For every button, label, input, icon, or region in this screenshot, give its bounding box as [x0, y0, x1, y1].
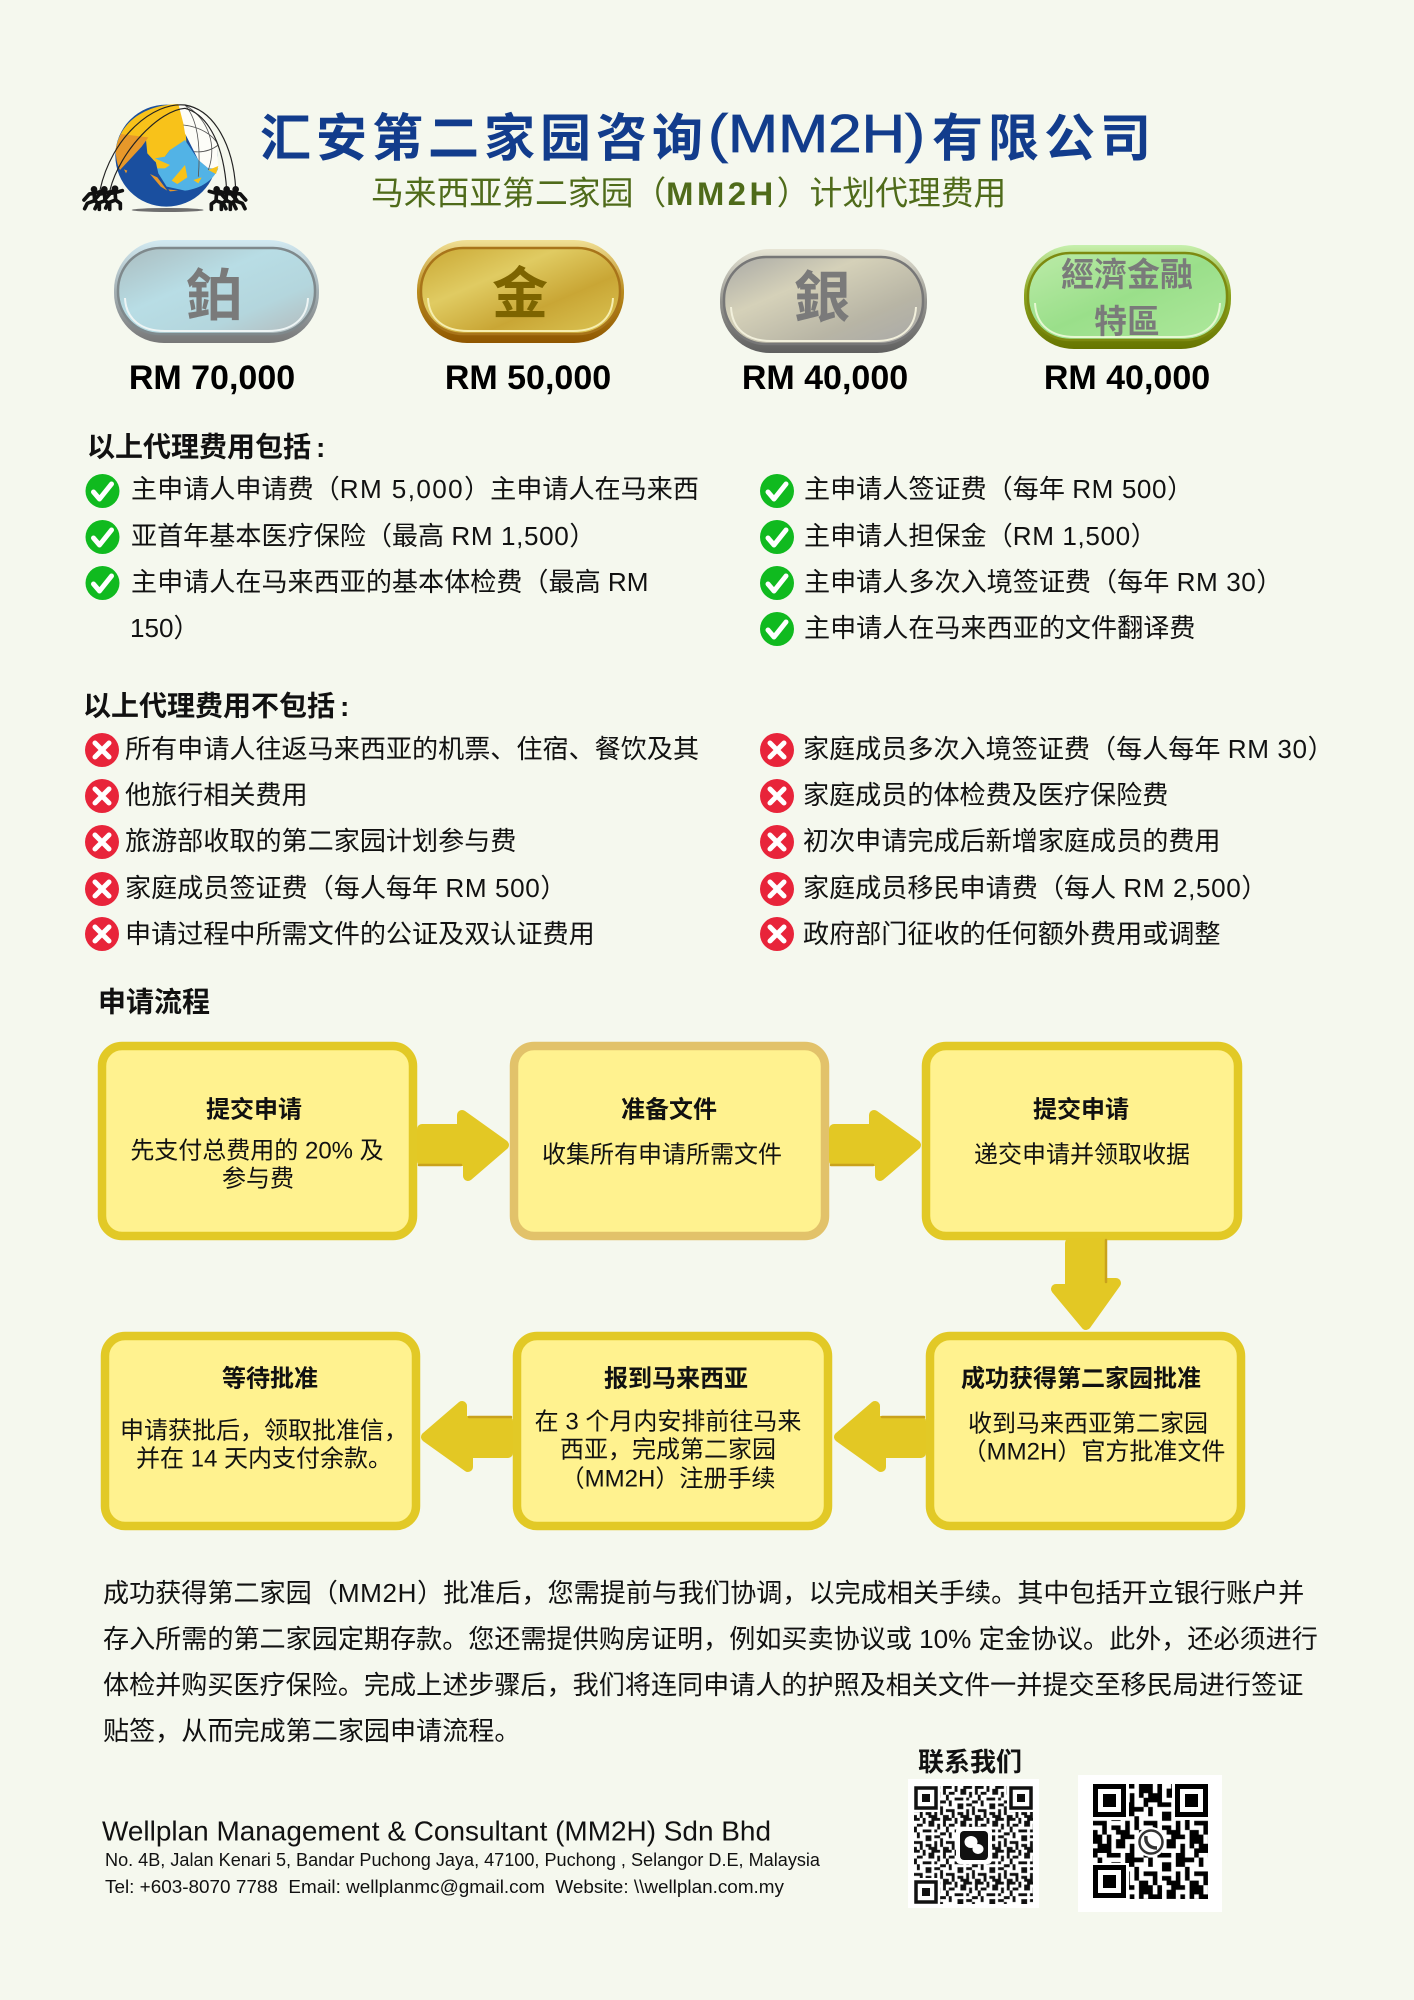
arrow: step 5 to 6 — [426, 1406, 511, 1467]
QR code: WeChat — [908, 1779, 1039, 1908]
panel: economic zone plan: 特區 — [1094, 295, 1160, 343]
step 6: 并在 14 天内支付余款。 — [136, 1446, 392, 1473]
step 5 — [517, 1336, 828, 1526]
item: 家庭成员的体检费及医疗保险费 — [803, 780, 1168, 810]
step 6 — [105, 1336, 416, 1526]
item — [86, 566, 649, 643]
price: silver: RM 40,000 — [742, 359, 908, 397]
item: 亚首年基本医疗保险（最高 RM 1,500） — [131, 521, 595, 551]
step 6: 等待批准 — [222, 1366, 318, 1393]
arrow: step 4 to 5 — [839, 1406, 924, 1467]
step 5: 西亚，完成第二家园 — [560, 1437, 776, 1464]
plan name: 金 — [492, 250, 548, 330]
arrow: step 2 to 3 — [831, 1115, 916, 1176]
panel: silver plan — [720, 249, 927, 353]
step 3: 递交申请并领取收据 — [974, 1142, 1190, 1169]
item: 家庭成员签证费（每人每年 RM 500） — [125, 873, 566, 903]
plan name: 鉑 — [186, 252, 242, 332]
plan name: 經濟金融 — [1061, 248, 1193, 296]
logo: globe with figures — [84, 104, 246, 212]
step 1: 参与费 — [222, 1166, 294, 1193]
paragraph: after approval: 体检并购买医疗保险。完成上述步骤后，我们将连同申请人的护照及相关文件一并提交至移民局进行签证 — [103, 1670, 1303, 1700]
step 4 — [930, 1336, 1241, 1526]
plan name: 銀 — [794, 254, 850, 334]
arrow: step 1 to 2 — [419, 1115, 504, 1176]
title: 汇安第二家园咨询 — [260, 97, 708, 171]
step 5: （MM2H）注册手续 — [561, 1466, 775, 1493]
item: 所有申请人往返马来西亚的机票、住宿、餐饮及其 — [125, 734, 699, 764]
item: 主申请人在马来西亚的基本体检费（最高 RM — [131, 567, 649, 597]
step 4: 收到马来西亚第二家园 — [968, 1411, 1208, 1438]
item: 主申请人签证费（每年 RM 500） — [804, 474, 1193, 504]
arrow: step 3 to 4 — [1056, 1240, 1116, 1325]
item: 家庭成员多次入境签证费（每人每年 RM 30） — [803, 734, 1334, 764]
step 6: 申请获批后，领取批准信， — [120, 1418, 408, 1445]
item: 主申请人在马来西亚的文件翻译费 — [804, 613, 1195, 643]
price: platinum: RM 70,000 — [129, 359, 295, 397]
item: 申请过程中所需文件的公证及双认证费用 — [125, 919, 595, 949]
panel: economic zone plan — [1024, 245, 1231, 349]
step 3 — [926, 1046, 1238, 1236]
price: economic zone: RM 40,000 — [1044, 359, 1210, 397]
item: 主申请人申请费（RM 5,000）主申请人在马来西 — [131, 474, 699, 504]
heading: included: 以上代理费用包括: — [87, 432, 325, 463]
item: 150） — [130, 613, 200, 643]
step 5: 在 3 个月内安排前往马来 — [535, 1409, 801, 1436]
step 1 — [102, 1046, 413, 1236]
heading: excluded: 以上代理费用不包括: — [83, 691, 349, 722]
item: 主申请人担保金（RM 1,500） — [804, 521, 1157, 551]
item: 旅游部收取的第二家园计划参与费 — [125, 826, 516, 856]
item: 初次申请完成后新增家庭成员的费用 — [803, 826, 1220, 856]
step 4: 成功获得第二家园批准 — [961, 1366, 1201, 1393]
QR code: WhatsApp — [1078, 1775, 1222, 1912]
item: 政府部门征收的任何额外费用或调整 — [803, 919, 1220, 949]
step 1: 先支付总费用的 20% 及 — [130, 1138, 384, 1165]
panel: platinum plan — [114, 240, 319, 343]
step 4: （MM2H）官方批准文件 — [963, 1439, 1225, 1466]
panel: gold plan — [417, 240, 624, 343]
item: 他旅行相关费用 — [125, 780, 308, 810]
paragraph: after approval: 成功获得第二家园（MM2H）批准后，您需提前与我们协调，以完成相关手续。其中包括开立银行账户并 — [103, 1578, 1304, 1608]
item: 主申请人多次入境签证费（每年 RM 30） — [804, 567, 1283, 597]
company name: Wellplan Management & Consultant (MM2H) Sdn Bhd — [102, 1816, 771, 1846]
item: 家庭成员移民申请费（每人 RM 2,500） — [803, 873, 1267, 903]
subtitle: 马来西亚第二家园（MM2H）计划代理费用 — [371, 174, 1006, 212]
step 1: 提交申请 — [206, 1096, 302, 1124]
title: (MM2H) — [708, 104, 925, 164]
step 3: 提交申请 — [1033, 1096, 1129, 1124]
paragraph: after approval: 贴签，从而完成第二家园申请流程。 — [103, 1716, 520, 1746]
contact details: Tel: +603-8070 7788 Email: wellplanmc@gmail.com Website: \\wellplan.com.my — [105, 1877, 784, 1897]
panel: included list — [86, 474, 1283, 646]
address: No. 4B, Jalan Kenari 5, Bandar Puchong Jaya, 47100, Puchong , Selangor D.E, Malaysia — [105, 1850, 821, 1870]
paragraph: after approval — [103, 1578, 1318, 1746]
step 2: 收集所有申请所需文件 — [542, 1142, 782, 1169]
panel: excluded list — [85, 733, 1334, 951]
heading: contact us: 联系我们 — [918, 1747, 1022, 1777]
heading: application process: 申请流程 — [98, 987, 210, 1018]
step 5: 报到马来西亚 — [604, 1366, 748, 1393]
step 2 — [514, 1046, 825, 1236]
title — [260, 97, 1156, 171]
step 2: 准备文件 — [621, 1096, 717, 1124]
title: 有限公司 — [932, 97, 1156, 171]
paragraph: after approval: 存入所需的第二家园定期存款。您还需提供购房证明，例如买卖协议或 10% 定金协议。此外，还必须进行 — [103, 1624, 1318, 1654]
price: gold: RM 50,000 — [445, 359, 611, 397]
